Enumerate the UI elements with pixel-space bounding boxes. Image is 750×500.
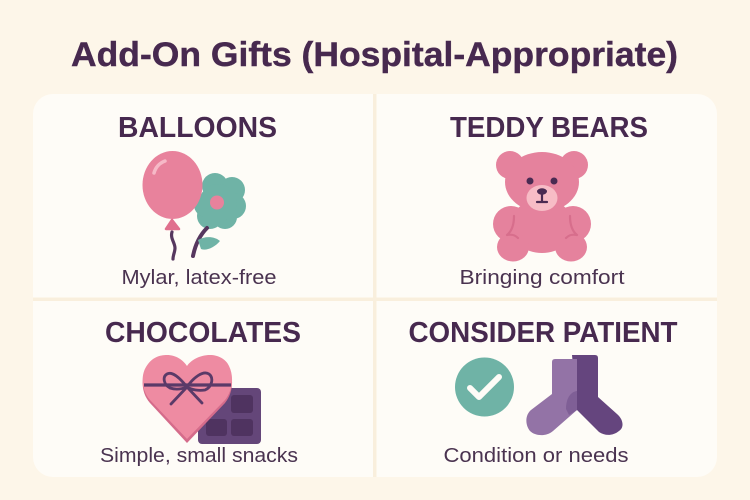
title: Add-On Gifts (Hospital-Appropriate) (71, 36, 678, 74)
heading: chocolates: CHOCOLATES (105, 317, 301, 349)
icon: check mark (455, 358, 514, 416)
icon: balloon and flower (142, 151, 246, 259)
panel: teddy bears (450, 112, 648, 289)
panel: card grid (33, 94, 717, 477)
icon: teddy bear (493, 151, 591, 262)
heading: teddy bears: TEDDY BEARS (450, 112, 648, 144)
icon: heart chocolate box (143, 355, 261, 444)
panel: chocolates (100, 317, 301, 467)
heading: balloons: BALLOONS (118, 112, 277, 144)
caption: consider patient: Condition or needs (444, 445, 628, 467)
panel: consider patient (408, 317, 678, 467)
caption: teddy bears: Bringing comfort (460, 267, 625, 289)
heading: consider patient: CONSIDER PATIENT (408, 317, 678, 349)
caption: chocolates: Simple, small snacks (100, 445, 298, 467)
icon: socks (526, 355, 623, 435)
caption: balloons: Mylar, latex-free (122, 267, 276, 289)
panel: balloons (118, 112, 277, 289)
